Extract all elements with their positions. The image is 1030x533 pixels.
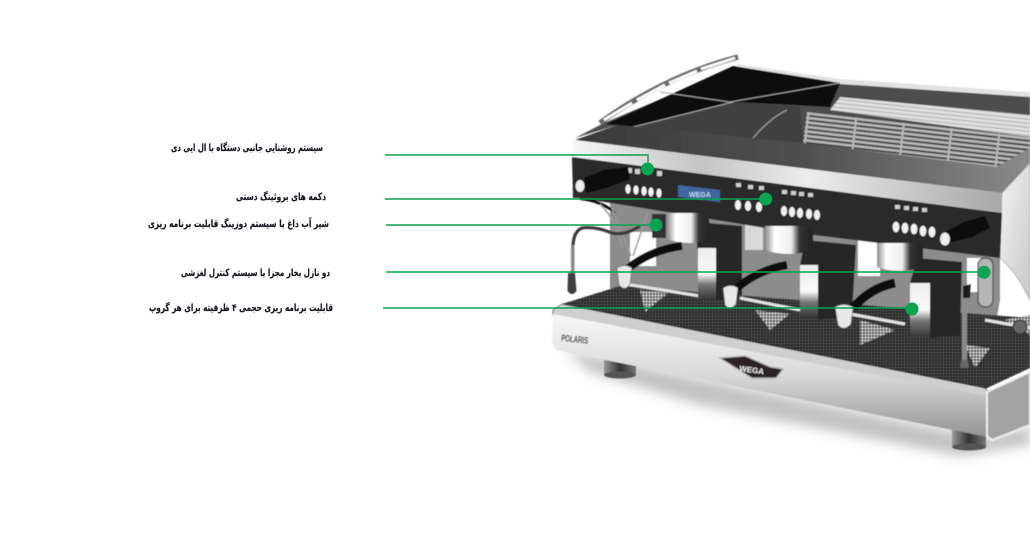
green marker	[978, 266, 990, 279]
callout 4: steam nozzles	[181, 266, 990, 279]
callout 3: hot water tap	[148, 217, 662, 232]
leader line	[386, 271, 984, 273]
floor shadow	[565, 350, 1030, 456]
dark group bodies	[652, 214, 962, 338]
callout 1: side lighting	[171, 141, 654, 176]
label text: شیر آب داغ با سیستم دوزینگ قابلیت برنامه ریزی	[148, 217, 329, 230]
left side bracket	[580, 198, 648, 256]
front grating	[803, 112, 1030, 167]
callout 5: volumetric programming	[149, 301, 918, 316]
green marker	[650, 218, 662, 232]
white rear edge	[737, 64, 1030, 97]
right steam valve window	[978, 258, 993, 307]
right side panel	[1000, 163, 1030, 300]
chrome group heads	[667, 213, 923, 271]
label text: دو نازل بخار مجزا با سیستم کنترل لغزشی	[181, 268, 330, 279]
blue display: WEGA	[689, 192, 711, 199]
leader line	[385, 155, 648, 169]
front panel	[552, 314, 987, 437]
back wall	[610, 198, 1000, 385]
green marker	[906, 302, 918, 316]
callout 2: manual brewing buttons	[236, 191, 772, 206]
left steam wand	[568, 226, 640, 294]
control panel	[572, 157, 1002, 258]
green marker	[641, 162, 654, 176]
right steam wand	[960, 284, 971, 368]
top surface	[575, 67, 1030, 167]
glass reflection lines	[633, 83, 840, 138]
green marker	[759, 192, 772, 206]
small panel icons	[627, 168, 927, 212]
rear grating	[830, 97, 1030, 137]
leader line	[386, 224, 656, 226]
tray lip	[553, 304, 990, 398]
illustration: espresso machine	[552, 57, 1030, 456]
WEGA badge: WEGA	[739, 364, 765, 376]
silver fascia band	[572, 140, 1002, 213]
right tray knob	[1013, 320, 1027, 334]
label text: سیستم روشنایی جانبی دستگاه با ال ایی دی	[171, 141, 323, 154]
black glass cover	[606, 66, 840, 127]
label text: قابلیت برنامه ریزی حجمی ۴ ظرفیته برای هر گروپ	[149, 301, 333, 314]
leader line	[383, 307, 912, 309]
right end cap	[987, 372, 1030, 440]
top rail with white slots	[600, 57, 738, 123]
tray back bars	[625, 284, 1030, 328]
left steam knob	[576, 167, 630, 193]
chrome columns	[698, 248, 930, 337]
dark lip	[575, 125, 1030, 193]
right steam knob	[940, 216, 990, 246]
portafilter handles	[617, 246, 895, 328]
drip tray	[562, 286, 1030, 389]
machine feet	[604, 358, 986, 450]
leader line	[385, 198, 766, 200]
control buttons	[625, 184, 936, 238]
WEGA badge	[720, 356, 783, 378]
POLARIS logo: POLARIS	[561, 333, 589, 347]
glass reflection panel	[620, 102, 803, 143]
label text: دکمه های بروئینگ دستی	[236, 191, 326, 203]
blue display	[678, 185, 720, 202]
white gaps behind groups	[630, 224, 981, 292]
